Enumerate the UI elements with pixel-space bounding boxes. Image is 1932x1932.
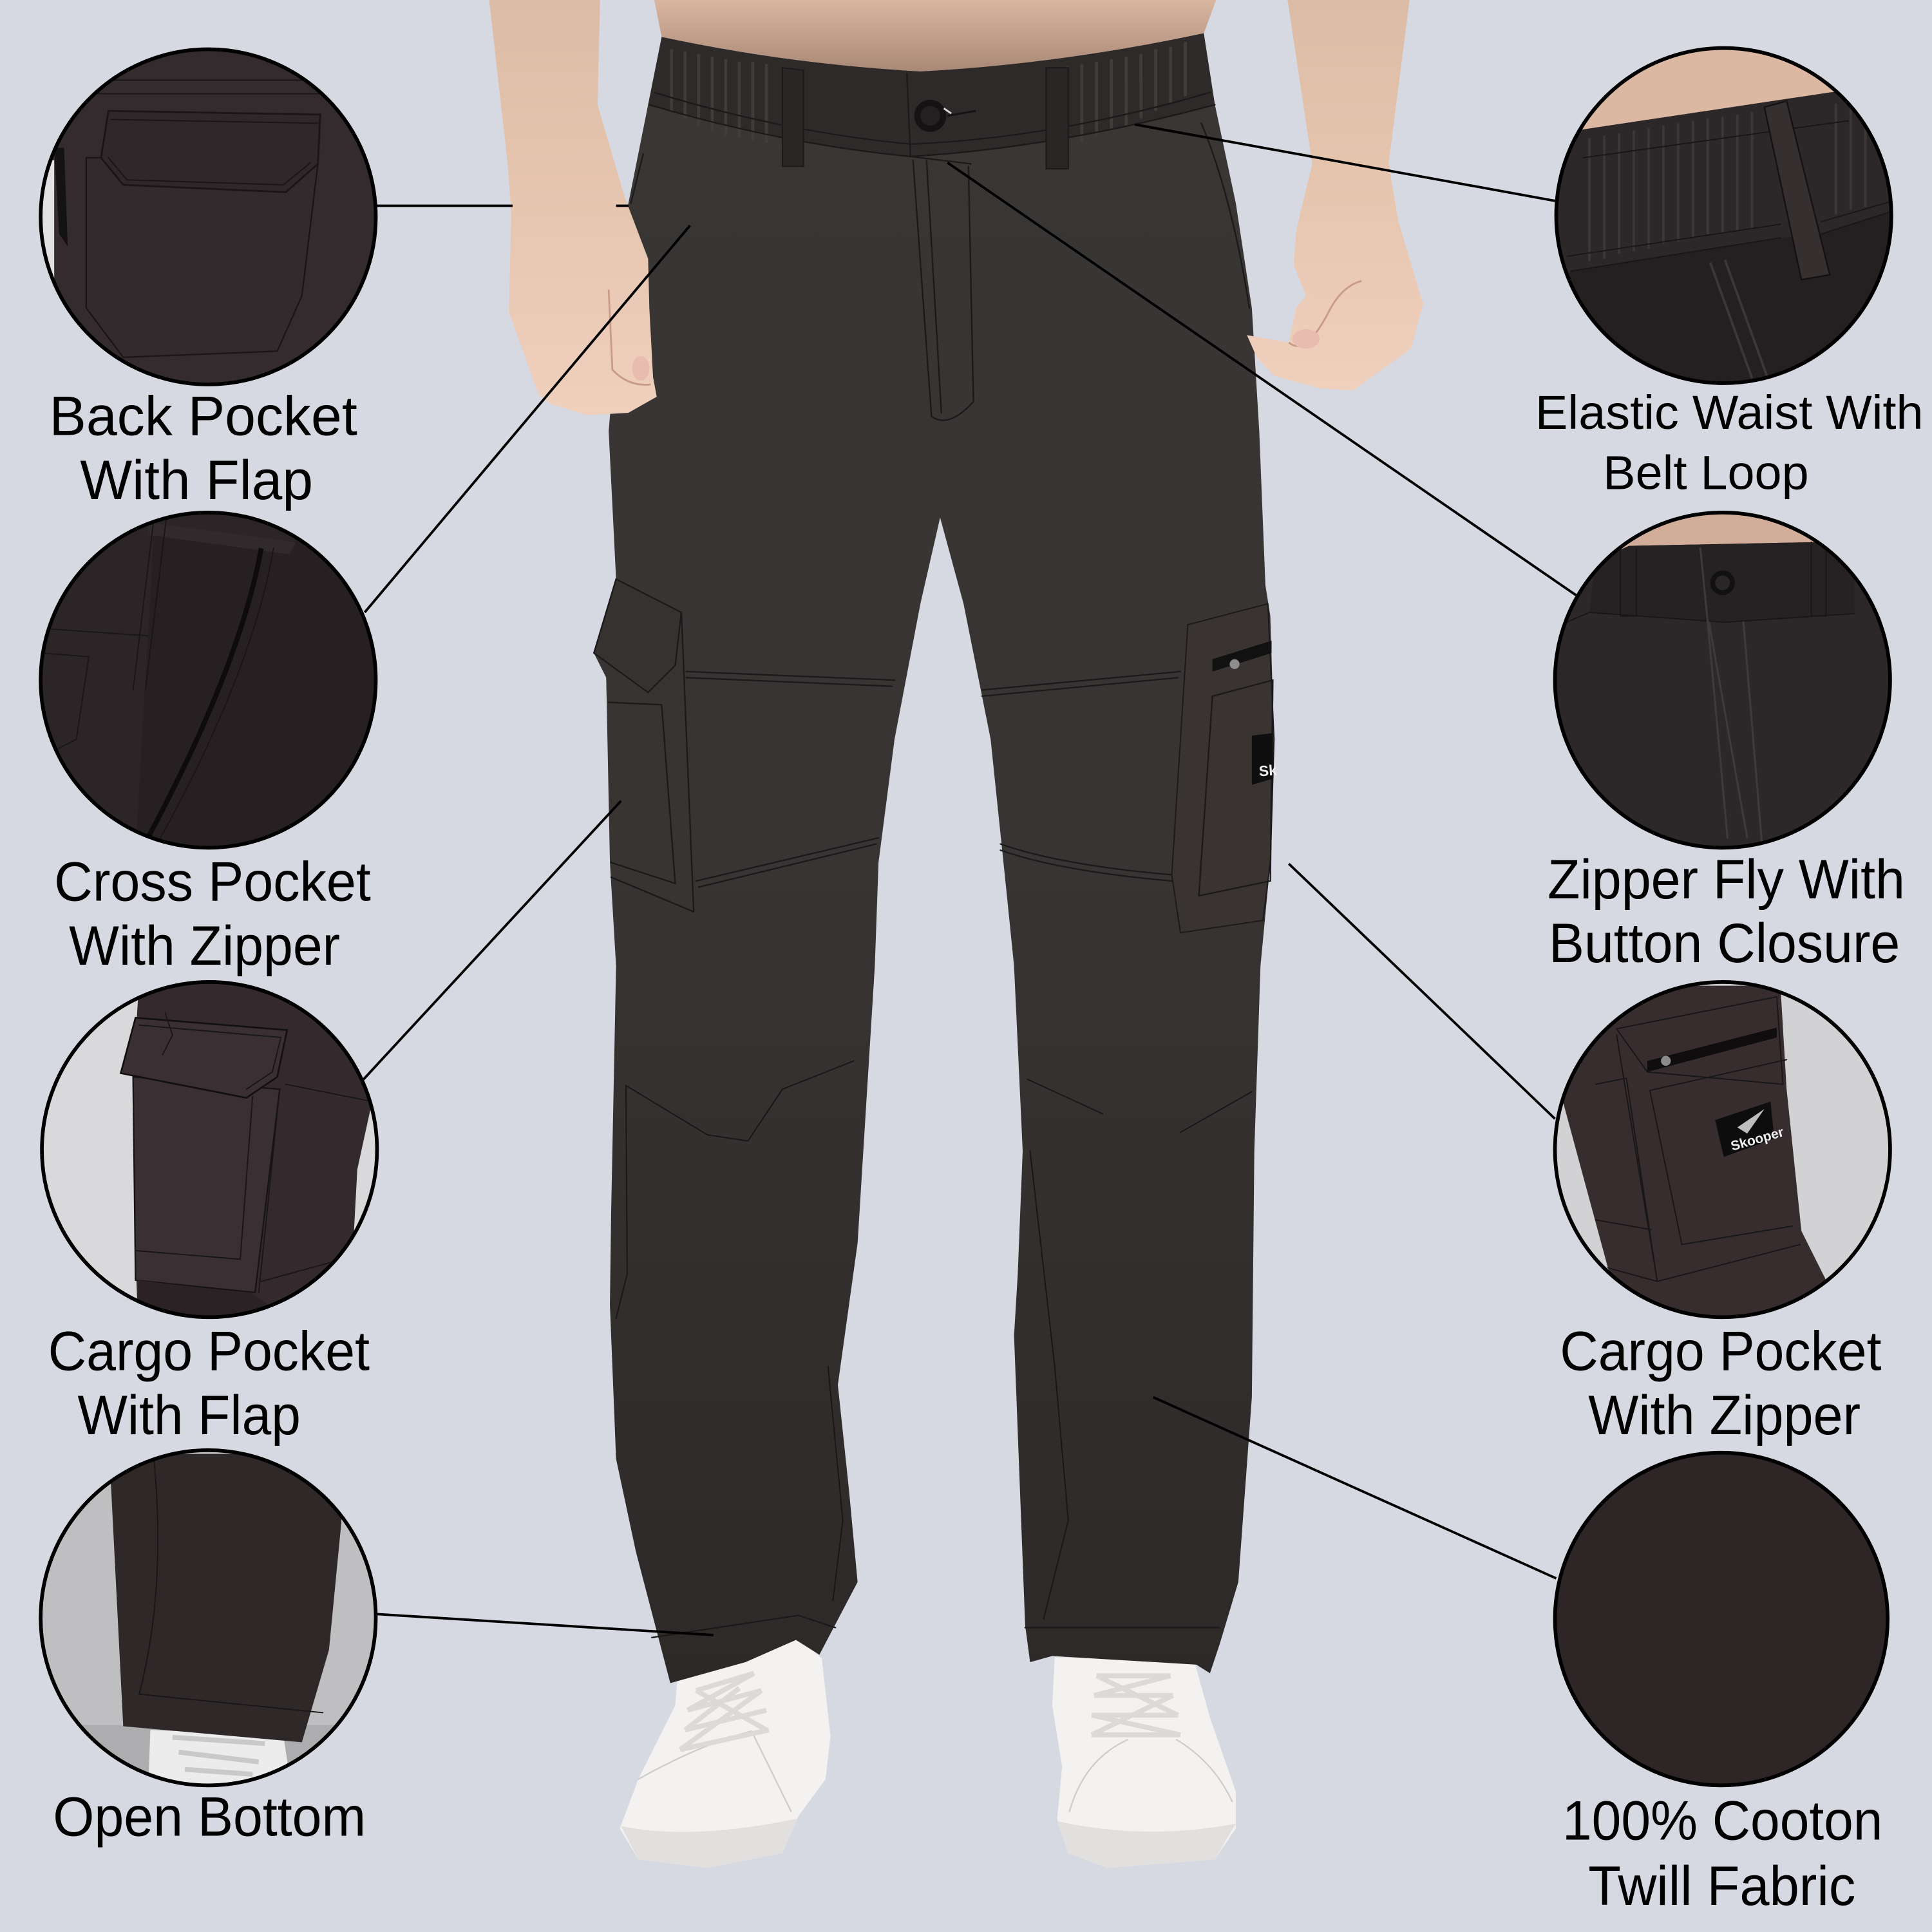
fly placket: [913, 160, 973, 421]
right cargo pocket with zipper and label: Sk: [1258, 761, 1278, 779]
leader line: zipper fly: [947, 163, 1576, 595]
leader line: cotton twill fabric: [1153, 1397, 1556, 1578]
circle detail: back pocket with flap: [37, 47, 382, 387]
label: cargo pocket with zipper: Cargo Pocket: [1560, 1321, 1882, 1383]
label: cotton twill fabric: [1562, 1790, 1882, 1917]
label: back pocket with flap: [50, 385, 357, 511]
label: elastic waist with belt loop: [1535, 385, 1924, 500]
label: cargo pocket with zipper: With Zipper: [1588, 1385, 1861, 1446]
circle detail: cotton twill fabric: [1550, 1448, 1895, 1793]
left hand: [489, 0, 657, 415]
label: cargo pocket with flap: [48, 1321, 370, 1446]
left cargo pocket with flap: [594, 579, 694, 912]
waistband stitching: [649, 92, 1215, 156]
circle detail: zipper fly with button closure: [1553, 510, 1897, 855]
label: open bottom: Open Bottom: [53, 1786, 366, 1848]
label: zipper fly with button closure: Button Closure: [1549, 913, 1900, 974]
leader line: cargo pocket with flap: [363, 801, 621, 1079]
model figure: torso, trousers, hands and shoes: [489, 0, 1423, 1868]
lower leg inner seam: [828, 1367, 843, 1600]
label: cotton twill fabric: Twill Fabric: [1588, 1855, 1855, 1917]
torso: [654, 0, 1216, 71]
label: cross pocket with zipper: [54, 851, 371, 977]
leader line: elastic waist: [1135, 124, 1555, 201]
hip pockets: [631, 123, 1249, 308]
label: cargo pocket with zipper: [1560, 1321, 1882, 1446]
label: elastic waist with belt loop: Belt Loop: [1603, 446, 1809, 500]
circle detail: cross pocket with zipper: [37, 510, 382, 850]
circle detail: cargo pocket with zipper: [1550, 980, 1897, 1325]
lower leg seams: [616, 1061, 1252, 1619]
left shoe: [620, 1636, 831, 1868]
circle detail: elastic waist with belt loop: [1553, 44, 1897, 390]
trouser hems: [652, 1615, 1220, 1638]
circle detail: open bottom: [37, 1448, 382, 1799]
right shoe: [1052, 1657, 1236, 1868]
label: elastic waist with belt loop: Elastic Waist With: [1535, 385, 1924, 439]
leader line: open bottom: [377, 1614, 714, 1635]
label: zipper fly with button closure: [1548, 849, 1905, 974]
cargo trousers: [594, 33, 1278, 1683]
knee seams: [687, 672, 1180, 887]
label: back pocket with flap: Back Pocket: [50, 385, 357, 447]
label: cargo pocket with flap: With Flap: [78, 1385, 301, 1446]
right cargo pocket with zipper and label: [1172, 604, 1278, 933]
label: cotton twill fabric: 100% Cooton: [1562, 1790, 1882, 1852]
belt loops: [782, 68, 1068, 169]
label: back pocket with flap: With Flap: [80, 450, 313, 511]
waist button: [907, 74, 976, 164]
leader line: back pocket: [377, 205, 629, 207]
label: cross pocket with zipper: With Zipper: [69, 915, 340, 977]
circle detail: cargo pocket with flap: [37, 980, 388, 1325]
label: zipper fly with button closure: Zipper Fly With: [1548, 849, 1905, 911]
leader line: cargo pocket with zipper: [1289, 864, 1555, 1119]
leader line: cross pocket: [365, 225, 690, 612]
label: cross pocket with zipper: Cross Pocket: [54, 851, 371, 913]
label: cargo pocket with flap: Cargo Pocket: [48, 1321, 370, 1383]
circle detail: cargo pocket with zipper: Skooper: [1729, 1124, 1785, 1154]
right hand: [1247, 0, 1423, 391]
